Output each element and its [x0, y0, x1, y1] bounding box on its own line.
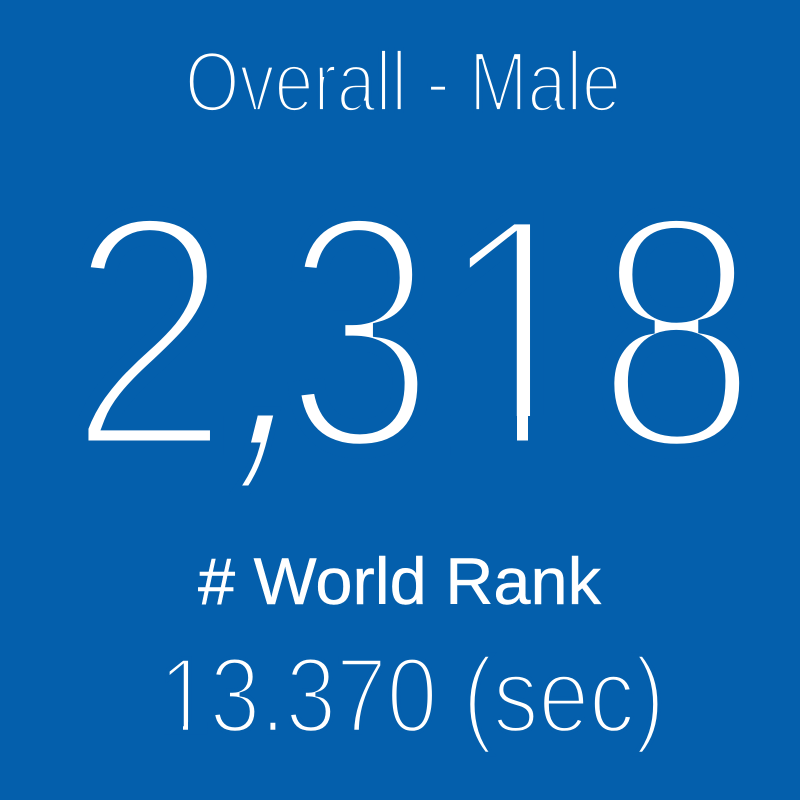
- big number: 2,318: 2: [67, 144, 231, 520]
- big number: 2,318: ,: [208, 143, 364, 518]
- big number: 2,318: 1: [434, 144, 602, 519]
- big number: 2,318: 8: [595, 144, 759, 519]
- big number: 2,318: 3: [284, 144, 435, 519]
- label: # World Rank: # World Rank: [198, 544, 602, 618]
- heading: Overall - Male: Overall - Male: [185, 35, 621, 130]
- value: 13.370 (sec): 13.370 (sec): [159, 635, 665, 755]
- big number: 2,318: [67, 143, 759, 520]
